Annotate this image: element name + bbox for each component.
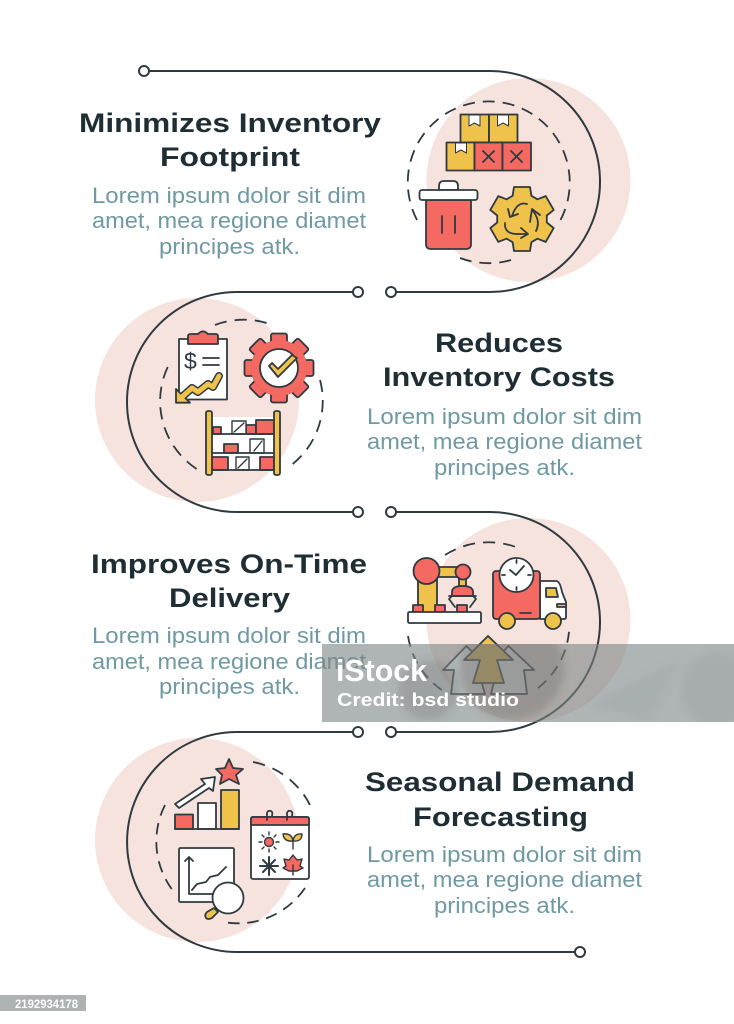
- heading: improves on-time delivery: Delivery: [169, 583, 290, 613]
- heading: reduces inventory costs: Inventory Costs: [383, 362, 615, 392]
- heading: improves on-time delivery: Improves On-Time: [91, 549, 367, 579]
- dashed ring: [408, 542, 569, 690]
- heading: minimizes inventory footprint: Minimizes Inventory: [79, 108, 381, 138]
- icon: recycling gear: [490, 187, 554, 251]
- body text: principes atk.: [434, 455, 575, 480]
- heading: reduces inventory costs: Reduces: [435, 328, 563, 358]
- icon: trash bin: [420, 181, 478, 249]
- image id tag: 2192934178: [15, 999, 79, 1011]
- dashed ring: [408, 101, 570, 263]
- body text: [367, 404, 642, 480]
- icon: gear with check: [244, 334, 314, 402]
- body text: amet, mea regione diamet: [92, 208, 366, 233]
- icon: delivery truck with clock: [493, 558, 566, 629]
- icon: clipboard with falling cost: $: [184, 348, 197, 374]
- icon: seasons calendar: [251, 811, 309, 879]
- body text: principes atk.: [159, 234, 300, 259]
- body text: principes atk.: [434, 893, 575, 918]
- body text: [367, 842, 642, 918]
- icon: robot arm: [408, 558, 481, 623]
- icon: clipboard with falling cost: [176, 332, 227, 403]
- icon: three up arrows: [443, 636, 534, 694]
- watermark band: [322, 644, 734, 722]
- heading: seasonal demand forecasting: Seasonal Demand: [365, 767, 635, 797]
- background circles: [95, 78, 630, 942]
- heading: minimizes inventory footprint: Footprint: [160, 142, 300, 172]
- watermark credit: Credit: bsd studio: [337, 690, 519, 710]
- heading: improves on-time delivery: [91, 549, 367, 613]
- body text: amet, mea regione diamet: [367, 867, 642, 892]
- body text: [92, 183, 366, 259]
- heading: minimizes inventory footprint: [79, 108, 381, 172]
- icon: boxes: [446, 114, 531, 170]
- watermark logo: iStock: [336, 653, 428, 688]
- icon: warehouse shelves: [206, 411, 280, 475]
- body text: Lorem ipsum dolor sit dim: [92, 183, 366, 208]
- icon: chart with magnifier: [179, 848, 244, 919]
- body text: Lorem ipsum dolor sit dim: [367, 404, 642, 429]
- connector line: [127, 66, 600, 957]
- body text: principes atk.: [159, 674, 300, 699]
- panel: seasonal demand forecasting: [156, 759, 642, 923]
- body text: Lorem ipsum dolor sit dim: [92, 623, 366, 648]
- panel: reduces inventory costs: [160, 320, 642, 480]
- body text: Lorem ipsum dolor sit dim: [367, 842, 642, 867]
- body text: amet, mea regione diamet: [92, 649, 366, 674]
- heading: seasonal demand forecasting: [365, 767, 635, 832]
- panel: minimizes inventory footprint: [79, 101, 570, 263]
- heading: seasonal demand forecasting: Forecasting: [413, 802, 588, 832]
- icon: growth bars and star: [175, 759, 243, 829]
- image id tag: [0, 995, 86, 1011]
- dashed ring: [160, 320, 323, 469]
- panel: improves on-time delivery: [91, 542, 569, 699]
- heading: reduces inventory costs: [383, 328, 615, 392]
- body text: amet, mea regione diamet: [367, 429, 642, 454]
- dashed ring: [156, 762, 310, 923]
- body text: [92, 623, 366, 699]
